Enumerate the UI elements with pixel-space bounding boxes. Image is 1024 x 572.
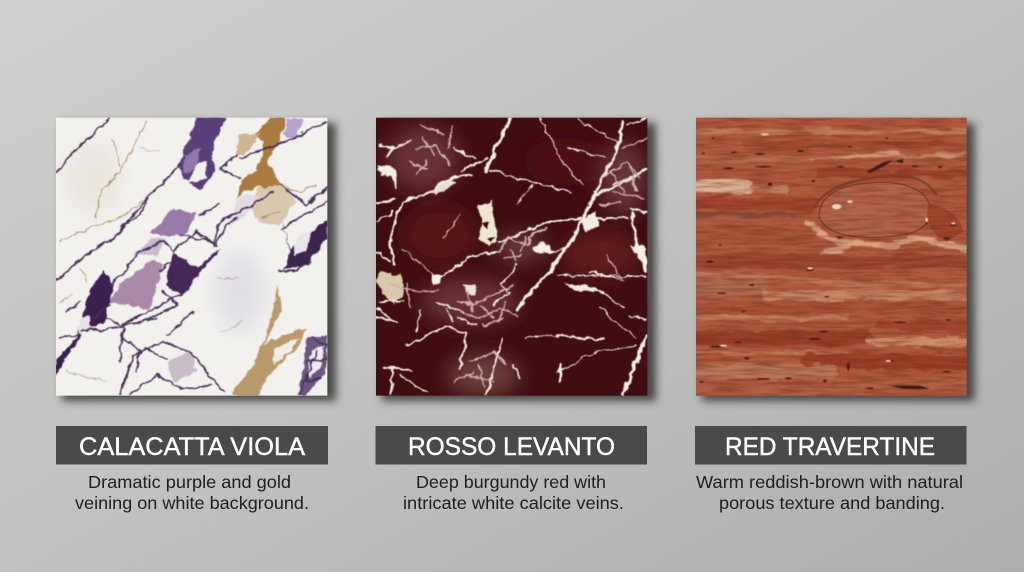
gold lower vein: [232, 285, 307, 396]
right gold web: [250, 185, 297, 227]
lower lilac: [167, 352, 197, 382]
lower right purple: [298, 335, 327, 396]
central inclusion: [813, 176, 963, 242]
heading text: RED TRAVERTINE: [725, 433, 935, 461]
panel: Red Travertine swatch: [693, 118, 975, 401]
heading text: CALACATTA VIOLA: [79, 433, 305, 461]
calcite blobs: [478, 200, 497, 247]
panel: Rosso Levanto swatch: [376, 118, 656, 401]
mottled breccia: [390, 125, 647, 388]
heading bar: [695, 426, 966, 464]
main white veins: [517, 120, 623, 310]
dark purple center: [167, 248, 220, 297]
heading bar: [56, 426, 328, 464]
description: Dramatic purple and gold: [88, 472, 291, 492]
banding: [693, 132, 967, 392]
heading text: ROSSO LEVANTO: [408, 433, 615, 461]
heading bar: [376, 426, 647, 464]
description: intricate white calcite veins.: [403, 493, 624, 513]
description: porous texture and banding.: [719, 493, 945, 513]
card: Rosso Levanto label: [376, 426, 647, 513]
pale specks: [719, 133, 955, 362]
purple top streak: [177, 118, 226, 190]
lilac lower blob: [109, 260, 163, 309]
card: Red Travertine label: [695, 426, 966, 513]
gold top vein: [237, 118, 286, 197]
dark purple lower left: [56, 270, 114, 377]
description: Deep burgundy red with: [416, 472, 606, 492]
dark purple right: [282, 215, 327, 270]
description: Warm reddish-brown with natural: [696, 472, 963, 492]
lilac mid: [150, 208, 197, 236]
card: Calacatta Viola label: [56, 426, 328, 513]
pores: [699, 138, 956, 389]
description: veining on white background.: [75, 493, 309, 513]
panel: Calacatta Viola swatch: [56, 118, 336, 401]
